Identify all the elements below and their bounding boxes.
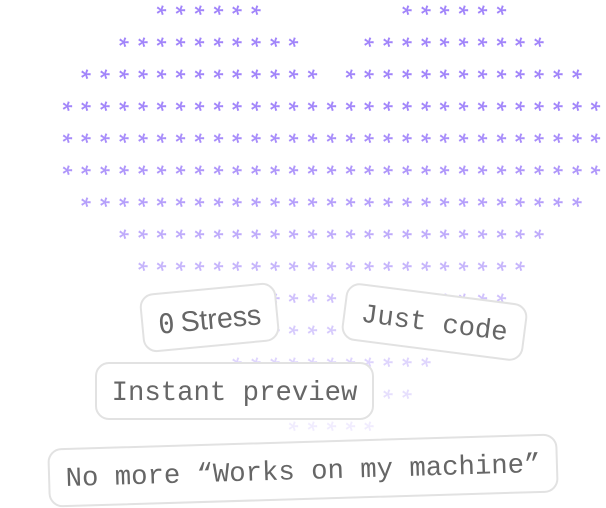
- heart of asterisks: *****************************: [45, 162, 603, 178]
- card: Just code: Just code: [359, 300, 509, 349]
- heart of asterisks: ***************************: [64, 194, 584, 210]
- heart of asterisks: **************************: [64, 66, 584, 82]
- card: Just code: [340, 282, 528, 362]
- heart of asterisks: ********************: [101, 34, 547, 50]
- heart of asterisks: ************: [139, 2, 509, 18]
- heart of asterisks: ***********: [215, 354, 433, 370]
- heart of asterisks: *********: [233, 386, 414, 402]
- card: Instant preview: Instant preview: [112, 378, 357, 409]
- heart of asterisks: ***********************: [101, 226, 547, 242]
- card: No more "Works on my machine": No more “Works on my machine”: [65, 450, 540, 495]
- card: Instant preview: [95, 362, 374, 420]
- heart of asterisks: *****: [271, 418, 377, 434]
- card: 0 Stress: 0Stress: [157, 299, 262, 341]
- heart of asterisks: *****************************: [45, 130, 603, 146]
- heart of asterisks: ***************: [177, 322, 471, 338]
- card: No more "Works on my machine": [47, 433, 558, 508]
- heart of asterisks: *********************: [120, 258, 528, 274]
- heart of asterisks: *******************: [139, 290, 509, 306]
- card: 0 Stress: [138, 282, 280, 353]
- heart of asterisks: *****************************: [45, 98, 603, 114]
